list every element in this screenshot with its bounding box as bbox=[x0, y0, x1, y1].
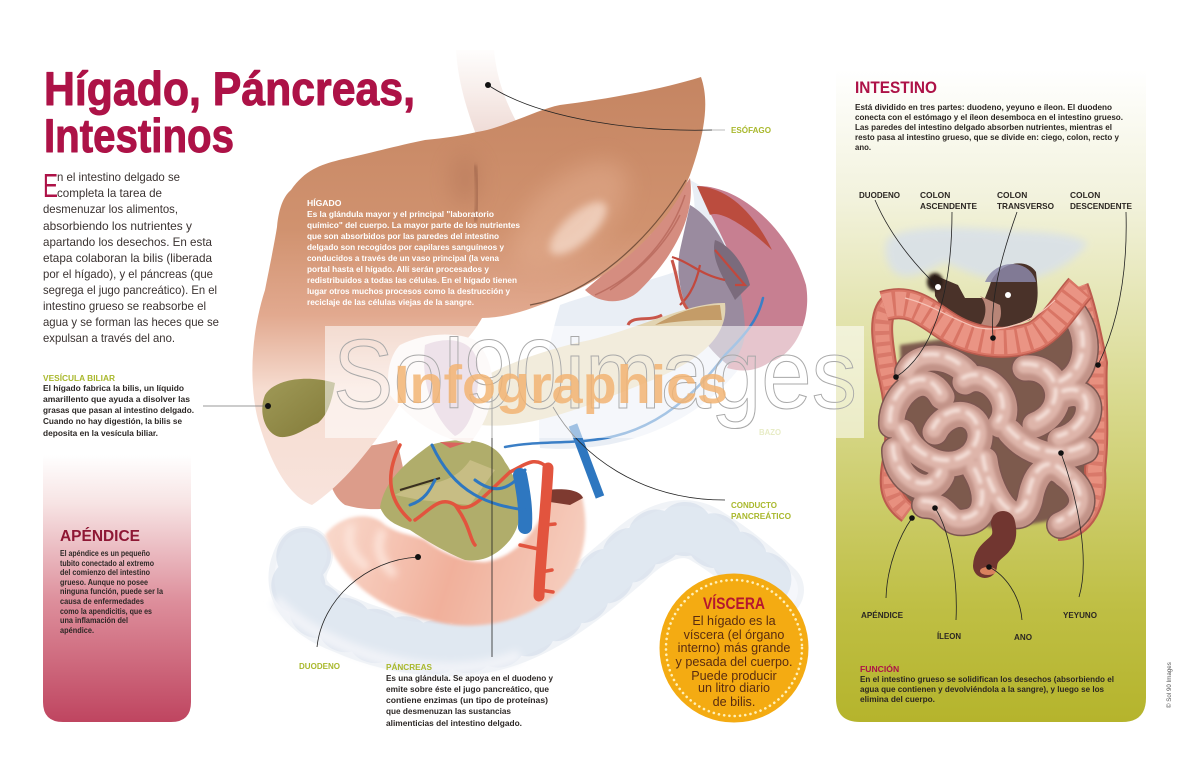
dark stomach background bbox=[927, 263, 1038, 340]
pancreatic duct bbox=[505, 298, 763, 447]
translucent liver shape bbox=[885, 227, 1088, 281]
text: introduction: completa la tarea de bbox=[57, 186, 162, 200]
text: hígado: químico" del cuerpo. La mayor parte de los nutrientes bbox=[307, 220, 520, 230]
rectum bbox=[985, 523, 1004, 566]
text: apéndice description: apéndice. bbox=[60, 625, 94, 635]
text: introduction: intestino grueso se reabsorbe el bbox=[43, 299, 206, 313]
text: apéndice description: grueso. Aunque no posee bbox=[60, 577, 148, 587]
pancreas head bbox=[380, 440, 521, 560]
text: hígado: reciclaje de las células viejas de la sangre. bbox=[307, 297, 474, 307]
portal vein bbox=[410, 425, 600, 527]
callout: víscera: VÍSCERA bbox=[703, 594, 765, 613]
text: hígado bbox=[307, 198, 520, 307]
labels: main illustration: PANCREÁTICO bbox=[731, 511, 791, 521]
text: vesícula biliar: VESÍCULA BILIAR bbox=[43, 373, 116, 383]
intestine leader lines bbox=[875, 200, 1126, 620]
text: introduction: absorbiendo los nutrientes y bbox=[43, 219, 192, 233]
translucent colon bbox=[275, 529, 775, 668]
labels: main illustration bbox=[299, 124, 791, 671]
text: apéndice description: del comienzo del intestino bbox=[60, 567, 150, 577]
text: páncreas: Es una glándula. Se apoya en el duodeno y bbox=[386, 673, 553, 683]
intestine labels: YEYUNO bbox=[1063, 610, 1097, 620]
title: Intestinos bbox=[44, 109, 234, 162]
text: apéndice description: como la apendicitis, que es bbox=[60, 606, 152, 616]
text: hígado: delgado son recogidos por capilares sanguíneos y bbox=[307, 242, 504, 252]
callout: víscera: Puede producir bbox=[691, 669, 777, 683]
text: intestino description: Las paredes del intestino delgado absorben nutrientes, mientras el bbox=[855, 122, 1112, 132]
credit: © Sol 90 Images bbox=[1166, 662, 1173, 708]
central duodenum loop bbox=[975, 296, 1001, 331]
artery bbox=[391, 445, 555, 596]
watermark: Infographics bbox=[394, 355, 728, 415]
text: páncreas bbox=[386, 662, 553, 728]
watermark: Sol90images bbox=[333, 319, 857, 429]
transverse colon bbox=[884, 288, 1080, 342]
text: apéndice description bbox=[60, 548, 163, 635]
función text: elimina del cuerpo. bbox=[860, 694, 935, 704]
labels: main illustration: DUODENO bbox=[299, 661, 340, 671]
small intestine loops bbox=[890, 311, 1088, 525]
heading: intestino: INTESTINO bbox=[855, 79, 937, 97]
text: hígado: que son absorbidos por las paredes del intestino bbox=[307, 231, 499, 241]
intestine labels: DUODENO bbox=[859, 190, 900, 200]
text: vesícula biliar: El hígado fabrica la bilis, un líquido bbox=[43, 383, 184, 393]
text: apéndice description: causa de enfermedades bbox=[60, 596, 144, 606]
white gastric pouch bbox=[388, 335, 492, 448]
text: páncreas: alimenticias del intestino delgado. bbox=[386, 718, 522, 728]
gallbladder bbox=[262, 379, 335, 437]
text: páncreas: emite sobre éste el jugo pancreático, que bbox=[386, 684, 549, 694]
intestine labels: ANO bbox=[1014, 632, 1032, 642]
intestine labels: ASCENDENTE bbox=[920, 201, 977, 211]
intestine labels: COLON bbox=[920, 190, 950, 200]
vessels toward spleen bbox=[628, 260, 690, 325]
text: introduction: expulsan a través del ano. bbox=[43, 331, 175, 345]
title bbox=[44, 62, 415, 162]
leader lines: main illustration bbox=[203, 82, 725, 657]
translucent stomach dome bbox=[539, 180, 766, 449]
intestine labels: TRANSVERSO bbox=[997, 201, 1054, 211]
callout: víscera: El hígado es la bbox=[692, 614, 776, 628]
callout: víscera: y pesada del cuerpo. bbox=[676, 655, 792, 669]
text: intestino description: conecta con el estómago y el íleon desemboca en el intestino grueso. bbox=[855, 112, 1123, 122]
intestine labels: COLON bbox=[997, 190, 1027, 200]
duodenum bbox=[325, 489, 585, 626]
text: introduction: E bbox=[43, 167, 58, 204]
text: vesícula biliar: Cuando no hay digestión, la bilis se bbox=[43, 416, 182, 426]
text: intestino description bbox=[855, 102, 1123, 152]
text: vesícula biliar: deposita en la vesícula biliar. bbox=[43, 428, 158, 438]
función text: FUNCIÓN bbox=[860, 663, 899, 674]
intestine labels bbox=[859, 190, 1132, 642]
text: intestino description: ano. bbox=[855, 142, 871, 152]
abdominal cavity bbox=[900, 320, 1092, 530]
text: páncreas: PÁNCREAS bbox=[386, 662, 432, 672]
upper duodenum bbox=[327, 440, 410, 509]
callout: víscera: víscera (el órgano bbox=[684, 628, 784, 642]
text: vesícula biliar: grasas que pasan al intestino delgado. bbox=[43, 405, 194, 415]
text: introduction: etapa colaboran la bilis (liberada bbox=[43, 251, 212, 265]
liver bbox=[252, 77, 705, 505]
labels: main illustration: ESÓFAGO bbox=[731, 124, 771, 135]
text: hígado: Es la glándula mayor y el principal "laboratorio bbox=[307, 209, 494, 219]
panel: intestino bbox=[836, 70, 1146, 722]
spleen bbox=[672, 186, 807, 370]
labels: main illustration: CONDUCTO bbox=[731, 500, 777, 510]
title: Hígado, Páncreas, bbox=[44, 62, 415, 115]
text: introduction: n el intestino delgado se bbox=[57, 170, 180, 184]
intestine labels: DESCENDENTE bbox=[1070, 201, 1132, 211]
text: introduction: agua y se forman las heces que se bbox=[43, 315, 219, 329]
text: intestino description: resto pasa al intestino grueso, que se divide en: ciego, colon, recto y bbox=[855, 132, 1119, 142]
callout: víscera: un litro diario bbox=[698, 681, 770, 695]
illustration: digestive organs bbox=[252, 50, 807, 668]
callout: víscera: de bilis. bbox=[713, 695, 755, 709]
text: hígado: portal hasta el hígado. Allí serán procesados y bbox=[307, 264, 489, 274]
función text bbox=[860, 663, 1114, 704]
labels: main illustration: BAZO bbox=[759, 427, 781, 437]
colon bbox=[882, 287, 1097, 530]
esophagus bbox=[456, 50, 518, 140]
stomach folds under the liver bbox=[585, 178, 691, 301]
callout: víscera bbox=[660, 574, 808, 722]
text: introduction bbox=[43, 167, 219, 345]
heading: apéndice: APÉNDICE bbox=[60, 526, 140, 545]
illustration: intestines bbox=[882, 227, 1097, 575]
text: vesícula biliar: amarillento que ayuda a disolver las bbox=[43, 394, 190, 404]
text: hígado: lugar otros muchos procesos como la destrucción y bbox=[307, 286, 510, 296]
pancreas body bbox=[470, 303, 725, 426]
función text: agua que contienen y devolviéndola a la sangre), y luego se los bbox=[860, 684, 1104, 694]
text: hígado: redistribuidos a todas las células. En el hígado tienen bbox=[307, 275, 517, 285]
text: apéndice description: El apéndice es un pequeño bbox=[60, 548, 150, 558]
text: páncreas: que desmenuzan las sustancias bbox=[386, 706, 511, 716]
text: hígado: conducidos a través de un vaso principal (la vena bbox=[307, 253, 499, 263]
función text: En el intestino grueso se solidifican los desechos (absorbiendo el bbox=[860, 674, 1114, 684]
text: introduction: por el hígado), y el páncreas (que bbox=[43, 267, 213, 281]
text: apéndice description: una inflamación del bbox=[60, 615, 128, 625]
panel: apéndice bbox=[43, 455, 191, 722]
intestine labels: ÍLEON bbox=[937, 630, 961, 641]
intestine labels: APÉNDICE bbox=[861, 609, 903, 620]
text: intestino description: Está dividido en tres partes: duodeno, yeyuno e íleon. El duodeno bbox=[855, 102, 1112, 112]
text: introduction: desmenuzar los alimentos, bbox=[43, 202, 178, 216]
text: vesícula biliar bbox=[43, 373, 194, 438]
text: páncreas: contiene enzimas (un tipo de proteínas) bbox=[386, 695, 548, 705]
text: apéndice description: tubito conectado al extremo bbox=[60, 558, 154, 568]
intestine labels: COLON bbox=[1070, 190, 1100, 200]
text: apéndice description: ninguna función, puede ser la bbox=[60, 586, 163, 596]
text: hígado: HÍGADO bbox=[307, 198, 342, 208]
text: introduction: segrega el jugo pancreático). En el bbox=[43, 283, 217, 297]
text: introduction: apartando los desechos. En esta bbox=[43, 235, 212, 249]
callout: víscera: interno) más grande bbox=[678, 641, 790, 655]
anal end bbox=[980, 567, 996, 575]
